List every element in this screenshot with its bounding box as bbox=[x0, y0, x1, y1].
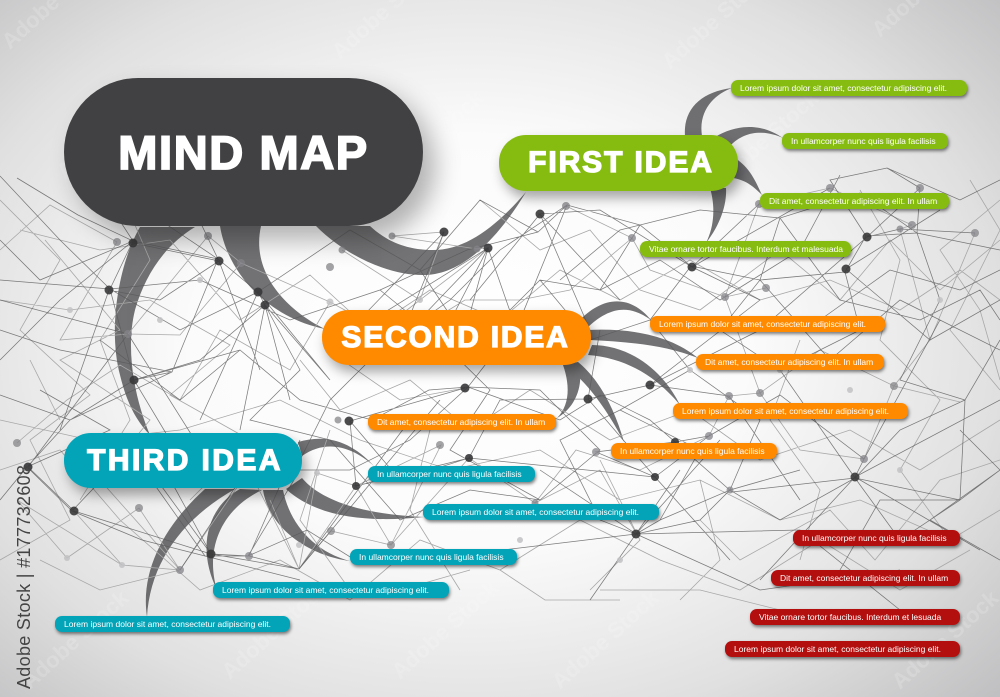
label: orange 2 bbox=[696, 354, 884, 370]
second idea box bbox=[322, 310, 591, 365]
ribbon: second idea branch 5 bbox=[557, 362, 580, 418]
label: teal 2: Lorem ipsum dolor sit amet, consectetur adipiscing elit. bbox=[432, 507, 639, 517]
label: teal 5: Lorem ipsum dolor sit amet, consectetur adipiscing elit. bbox=[64, 619, 271, 629]
watermarks: Adobe Stock bbox=[17, 585, 134, 694]
first idea box bbox=[499, 135, 738, 191]
watermarks: Adobe Stock bbox=[372, 85, 489, 194]
second idea box: SECOND IDEA bbox=[341, 320, 570, 354]
network nodes bbox=[13, 184, 979, 574]
label: orange 3: Lorem ipsum dolor sit amet, consectetur adipiscing elit. bbox=[682, 406, 889, 416]
ribbon: third idea branch 2 bbox=[286, 478, 424, 519]
label: red 1: In ullamcorper nunc quis ligula facilisis bbox=[802, 533, 947, 543]
label: teal 3: In ullamcorper nunc quis ligula facilisis bbox=[359, 552, 504, 562]
ribbon: second idea branch 4 bbox=[568, 362, 624, 442]
label: teal 4: Lorem ipsum dolor sit amet, consectetur adipiscing elit. bbox=[222, 585, 429, 595]
ribbon: third idea branch 4 bbox=[207, 489, 262, 590]
ribbon: third idea branch 3 bbox=[263, 490, 350, 561]
first idea labels bbox=[638, 80, 970, 262]
ribbon: second idea branch 3 bbox=[588, 345, 680, 405]
label: teal 2 bbox=[423, 504, 659, 520]
label: teal 1 bbox=[368, 466, 535, 482]
label: orange 1: Lorem ipsum dolor sit amet, consectetur adipiscing elit. bbox=[659, 319, 866, 329]
label: teal 4 bbox=[213, 582, 449, 598]
watermarks: Adobe Stock bbox=[707, 85, 824, 194]
label: orange 3 bbox=[673, 403, 908, 419]
ribbon: first idea branch 1 bbox=[685, 88, 732, 136]
watermarks: Adobe Stock bbox=[167, 120, 284, 229]
label: teal 5 bbox=[55, 616, 290, 632]
label: green 2: In ullamcorper nunc quis ligula facilisis bbox=[791, 136, 936, 146]
ribbon: first idea branch 2 bbox=[715, 127, 783, 146]
label: green 3: Dit amet, consectetur adipiscing elit. In ullam bbox=[769, 196, 937, 206]
label: green 1: Lorem ipsum dolor sit amet, consectetur adipiscing elit. bbox=[740, 83, 947, 93]
ribbon: third idea branch 5 bbox=[146, 489, 235, 617]
watermarks: Adobe Stock bbox=[547, 585, 664, 694]
second idea labels bbox=[366, 316, 912, 464]
ribbon: first idea branch 4 bbox=[706, 188, 726, 243]
third idea box: THIRD IDEA bbox=[87, 444, 283, 476]
label: orange 4: In ullamcorper nunc quis ligula facilisis bbox=[620, 446, 765, 456]
label: red 4 bbox=[725, 641, 960, 657]
label: red 3 bbox=[750, 609, 960, 625]
label: green 3 bbox=[760, 193, 949, 209]
first idea box: FIRST IDEA bbox=[528, 146, 714, 179]
label: orange 5 bbox=[368, 414, 556, 430]
side stock id text: Adobe Stock | #177732608 bbox=[14, 465, 34, 689]
ribbon: second idea branch 2 bbox=[588, 330, 698, 358]
ribbon: first idea branch 3 bbox=[733, 158, 762, 195]
label: red 2 bbox=[771, 570, 960, 586]
label: red 1 bbox=[793, 530, 960, 546]
label: red 3: Vitae ornare tortor faucibus. Interdum et lesuada bbox=[759, 612, 941, 622]
label: teal 1: In ullamcorper nunc quis ligula facilisis bbox=[377, 469, 522, 479]
label: teal 3 bbox=[350, 549, 517, 565]
watermarks: Adobe Stock bbox=[887, 585, 1000, 694]
ribbon: third idea branch 1 bbox=[298, 439, 374, 466]
watermarks: Adobe Stock bbox=[387, 575, 504, 684]
third idea labels bbox=[54, 466, 662, 636]
label: green 1 bbox=[731, 80, 967, 96]
central title box bbox=[64, 78, 423, 226]
ribbon: main to second idea bbox=[220, 226, 325, 329]
label: green 2 bbox=[782, 133, 948, 149]
label: red 4: Lorem ipsum dolor sit amet, consectetur adipiscing elit. bbox=[734, 644, 941, 654]
watermarks: Adobe Stock bbox=[52, 75, 169, 184]
label: green 4: Vitae ornare tortor faucibus. Interdum et malesuada bbox=[649, 244, 843, 254]
label: orange 4 bbox=[611, 443, 777, 459]
label: orange 2: Dit amet, consectetur adipiscing elit. In ullam bbox=[705, 357, 873, 367]
third idea box bbox=[64, 433, 302, 488]
central title box: MIND MAP bbox=[118, 126, 369, 178]
label: green 4 bbox=[640, 241, 851, 257]
ribbon: main to third idea bbox=[115, 227, 195, 435]
ribbon: main to first idea bbox=[316, 192, 526, 275]
label: orange 1 bbox=[650, 316, 885, 332]
label: orange 5: Dit amet, consectetur adipiscing elit. In ullam bbox=[377, 417, 545, 427]
red labels bbox=[724, 530, 964, 662]
label: red 2: Dit amet, consectetur adipiscing elit. In ullam bbox=[780, 573, 948, 583]
ribbon: second idea branch 1 bbox=[578, 301, 651, 330]
watermarks: Adobe Stock bbox=[217, 575, 334, 684]
